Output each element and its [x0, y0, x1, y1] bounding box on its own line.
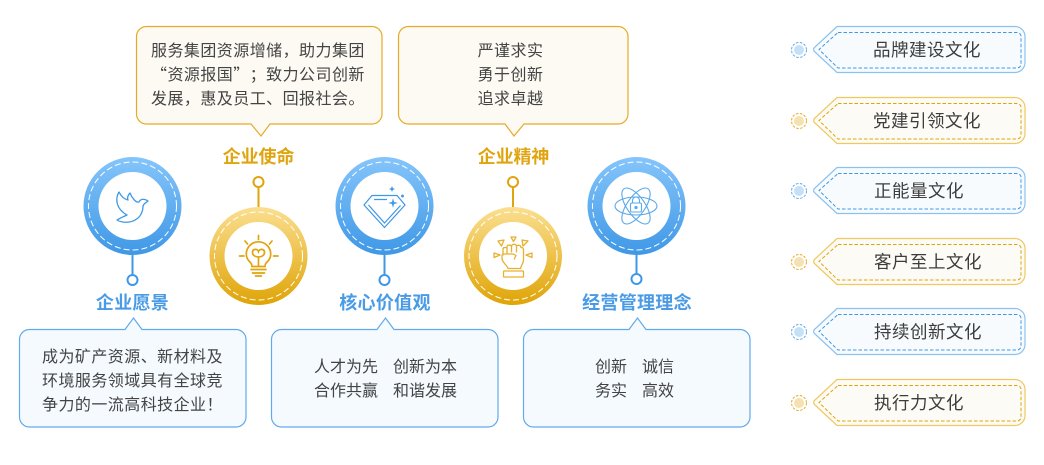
- callout: enterprise spirit text: 追求卓越: [478, 90, 543, 108]
- icon: diamond: [364, 186, 405, 228]
- tag: positive energy culture: 正能量文化: [874, 181, 964, 201]
- callout: enterprise spirit text: 勇于创新: [478, 66, 543, 84]
- callout: enterprise mission text: 服务集团资源增储，助力集团: [151, 42, 365, 60]
- tag: positive energy culture: [792, 168, 1025, 214]
- node: spirit circle: [464, 177, 562, 305]
- icon: raised fist: [494, 237, 532, 277]
- tag: customer first culture: [792, 238, 1025, 284]
- callout: management philosophy text: 务实: [595, 382, 627, 400]
- node: philosophy circle: [588, 157, 686, 284]
- heading: management philosophy: 经营管理理念: [582, 292, 692, 313]
- node: mission circle: [210, 177, 308, 305]
- icon: light bulb with heart: [240, 236, 278, 276]
- callout: core values text: 人才为先: [314, 358, 378, 376]
- callout: core values text: 和谐发展: [393, 382, 457, 400]
- tag: execution culture: [792, 380, 1025, 426]
- callout: enterprise vision text: [20, 318, 246, 427]
- callout: management philosophy text: 诚信: [642, 358, 674, 376]
- node: values circle: [336, 157, 434, 285]
- heading: enterprise spirit: 企业精神: [478, 146, 549, 167]
- tag: party building culture: 党建引领文化: [873, 111, 981, 131]
- callout: enterprise spirit text: 严谨求实: [478, 42, 543, 60]
- icon: dove: [117, 192, 148, 222]
- callout: management philosophy text: 创新: [595, 358, 627, 376]
- callout: management philosophy text: [524, 318, 750, 427]
- callout: core values text: 合作共赢: [314, 382, 378, 400]
- callout: core values text: 创新为本: [393, 358, 457, 376]
- callout: enterprise mission text: 发展，惠及员工、回报社会。: [151, 90, 365, 108]
- node: vision circle: [84, 157, 182, 285]
- heading: enterprise vision: 企业愿景: [96, 292, 169, 313]
- tag: brand building culture: [792, 26, 1025, 72]
- tag: brand building culture: 品牌建设文化: [873, 40, 981, 60]
- callout: enterprise mission text: “资源报国”；致力公司创新: [151, 61, 365, 85]
- tag: customer first culture: 客户至上文化: [874, 252, 982, 272]
- heading: core values: 核心价值观: [339, 292, 431, 313]
- tag: execution culture: 执行力文化: [874, 393, 964, 413]
- callout: enterprise vision text: 环境服务领域具有全球竞: [42, 371, 223, 390]
- tag: continuous innovation culture: [792, 308, 1025, 354]
- callout: enterprise vision text: 争力的一流高科技企业！: [42, 391, 223, 415]
- icon: atom with padlock: [615, 184, 657, 228]
- tag: continuous innovation culture: 持续创新文化: [874, 322, 982, 342]
- tag: party building culture: [792, 98, 1025, 144]
- heading: enterprise mission: 企业使命: [223, 146, 294, 167]
- callout: enterprise spirit text: [398, 26, 628, 136]
- callout: enterprise mission text: [136, 26, 382, 136]
- callout: management philosophy text: 高效: [642, 382, 674, 400]
- callout: core values text: [272, 318, 498, 427]
- callout: enterprise vision text: 成为矿产资源、新材料及: [42, 348, 223, 366]
